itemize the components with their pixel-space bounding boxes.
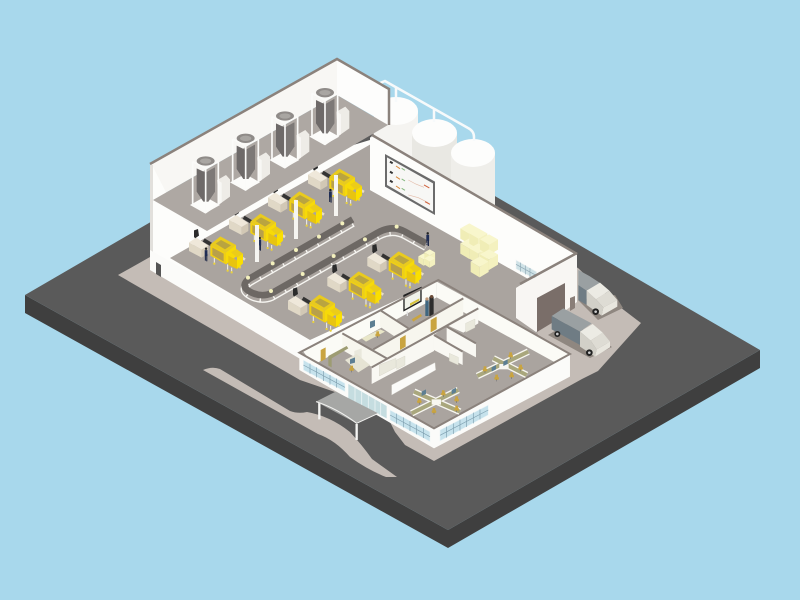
silo 1 bbox=[190, 156, 230, 213]
worker bbox=[205, 248, 207, 261]
site platform bbox=[25, 109, 760, 548]
worker bbox=[258, 237, 261, 251]
front windows left bbox=[303, 360, 345, 392]
outdoor storage tanks bbox=[373, 81, 495, 233]
stacked pallet boxes bbox=[460, 223, 498, 277]
right wall interior face bbox=[370, 137, 577, 280]
machine 1 bbox=[189, 229, 245, 273]
desk cluster front bbox=[412, 388, 460, 415]
material silos on mezzanine bbox=[190, 88, 349, 213]
access road strip bbox=[203, 368, 397, 477]
office floor bbox=[299, 280, 570, 428]
building upper walls bbox=[150, 60, 577, 358]
rear-right inner wall bbox=[437, 282, 570, 362]
door bbox=[321, 347, 326, 362]
rear-left inner wall bbox=[303, 282, 437, 365]
open-plan side partition bbox=[434, 335, 463, 365]
office block bbox=[299, 280, 570, 448]
silo 2 bbox=[230, 134, 270, 191]
front windows right bbox=[390, 410, 430, 442]
finished goods pallet bbox=[418, 249, 435, 268]
worker bbox=[329, 189, 332, 203]
conveyor belt bbox=[245, 219, 426, 299]
rear delivery truck bbox=[578, 270, 617, 316]
factory floor bbox=[170, 145, 540, 340]
machine 2 bbox=[229, 206, 285, 251]
meeting room screen and people bbox=[403, 287, 434, 322]
left room furniture bbox=[328, 346, 370, 372]
door bbox=[431, 317, 437, 332]
silo 4 bbox=[309, 88, 349, 145]
glazed entrance bbox=[348, 384, 387, 418]
side windows bbox=[440, 405, 488, 441]
door bbox=[400, 335, 406, 350]
front delivery truck bbox=[552, 308, 610, 357]
entrance canopy bbox=[316, 392, 378, 440]
cabinets bbox=[379, 319, 475, 376]
long corridor partition bbox=[373, 298, 463, 366]
machine 5 bbox=[288, 287, 344, 332]
low divider bbox=[392, 363, 436, 395]
silo feed pipes bbox=[380, 81, 474, 141]
ground floor equipment bbox=[189, 161, 435, 332]
left room partition bbox=[342, 333, 387, 367]
truck pads bbox=[548, 295, 623, 358]
open-plan side partition bbox=[447, 327, 476, 357]
wall-mounted dashboard monitor bbox=[385, 154, 435, 215]
mezzanine slab bbox=[153, 95, 388, 231]
desk cluster rear bbox=[477, 352, 528, 381]
room desk bbox=[362, 320, 385, 342]
machine 3 bbox=[268, 184, 324, 228]
support columns bbox=[257, 175, 336, 262]
front-left exterior wall bbox=[150, 250, 310, 360]
partition between rooms bbox=[380, 310, 408, 336]
building wall top edges bbox=[150, 59, 577, 254]
roller door bbox=[537, 283, 565, 332]
silo 3 bbox=[269, 111, 309, 168]
machine 7 bbox=[367, 244, 423, 288]
wall top lines bbox=[299, 280, 570, 428]
exterior walls bbox=[299, 353, 570, 448]
worker bbox=[426, 232, 429, 246]
loading dock wall bbox=[516, 253, 577, 332]
service door bbox=[570, 296, 575, 311]
machine 4 bbox=[308, 161, 364, 206]
concrete apron around building bbox=[118, 180, 641, 461]
wall window bbox=[516, 260, 537, 280]
machine 6 bbox=[327, 264, 383, 308]
open-plan front partition bbox=[372, 308, 478, 384]
